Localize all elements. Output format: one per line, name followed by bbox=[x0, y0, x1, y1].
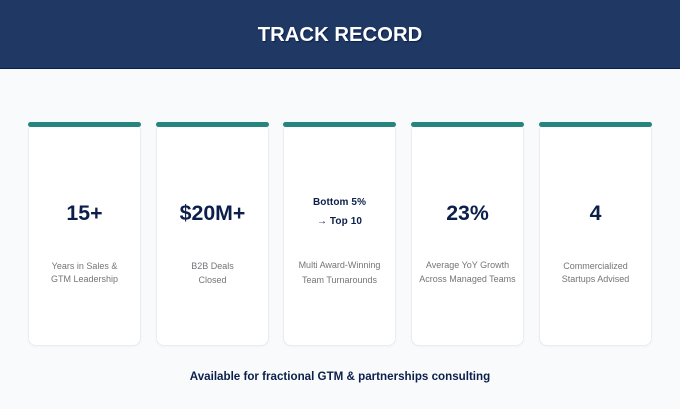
stat: $20M+: $20M+ bbox=[180, 201, 245, 225]
label: growth: Across Managed Teams bbox=[419, 274, 516, 284]
label: years: GTM Leadership bbox=[51, 274, 118, 284]
panel: turnarounds bbox=[283, 123, 396, 346]
panel: growth bbox=[411, 123, 524, 346]
panel: deals closed bbox=[156, 123, 269, 346]
label: turnarounds: Team Turnarounds bbox=[302, 275, 377, 285]
stat: 4: 4 bbox=[590, 201, 601, 225]
label: startups bbox=[562, 261, 629, 284]
label: deals: B2B Deals bbox=[191, 261, 234, 271]
title: TRACK RECORD bbox=[258, 24, 422, 46]
label: growth bbox=[419, 260, 516, 284]
label: years bbox=[51, 261, 118, 284]
panel: startups bbox=[539, 123, 652, 346]
stat: bottom 5% to top 10: → Top 10 bbox=[317, 216, 362, 227]
label: turnarounds bbox=[299, 260, 380, 285]
stat: 15+: 15+ bbox=[66, 201, 103, 225]
label: startups: Startups Advised bbox=[562, 274, 629, 284]
stat: bottom 5% to top 10: Bottom 5% bbox=[313, 197, 366, 208]
stat: bottom 5% to top 10 bbox=[313, 197, 366, 227]
label: deals bbox=[191, 261, 234, 285]
footer note: Available for fractional GTM & partnerships consulting bbox=[190, 370, 490, 383]
label: deals: Closed bbox=[198, 275, 226, 285]
stat: 23%: 23% bbox=[446, 201, 489, 225]
label: startups: Commercialized bbox=[563, 261, 628, 271]
panel: years of experience bbox=[28, 123, 141, 346]
label: years: Years in Sales & bbox=[52, 261, 117, 271]
label: turnarounds: Multi Award-Winning bbox=[299, 260, 380, 270]
header band bbox=[0, 0, 680, 69]
label: growth: Average YoY Growth bbox=[426, 260, 509, 270]
